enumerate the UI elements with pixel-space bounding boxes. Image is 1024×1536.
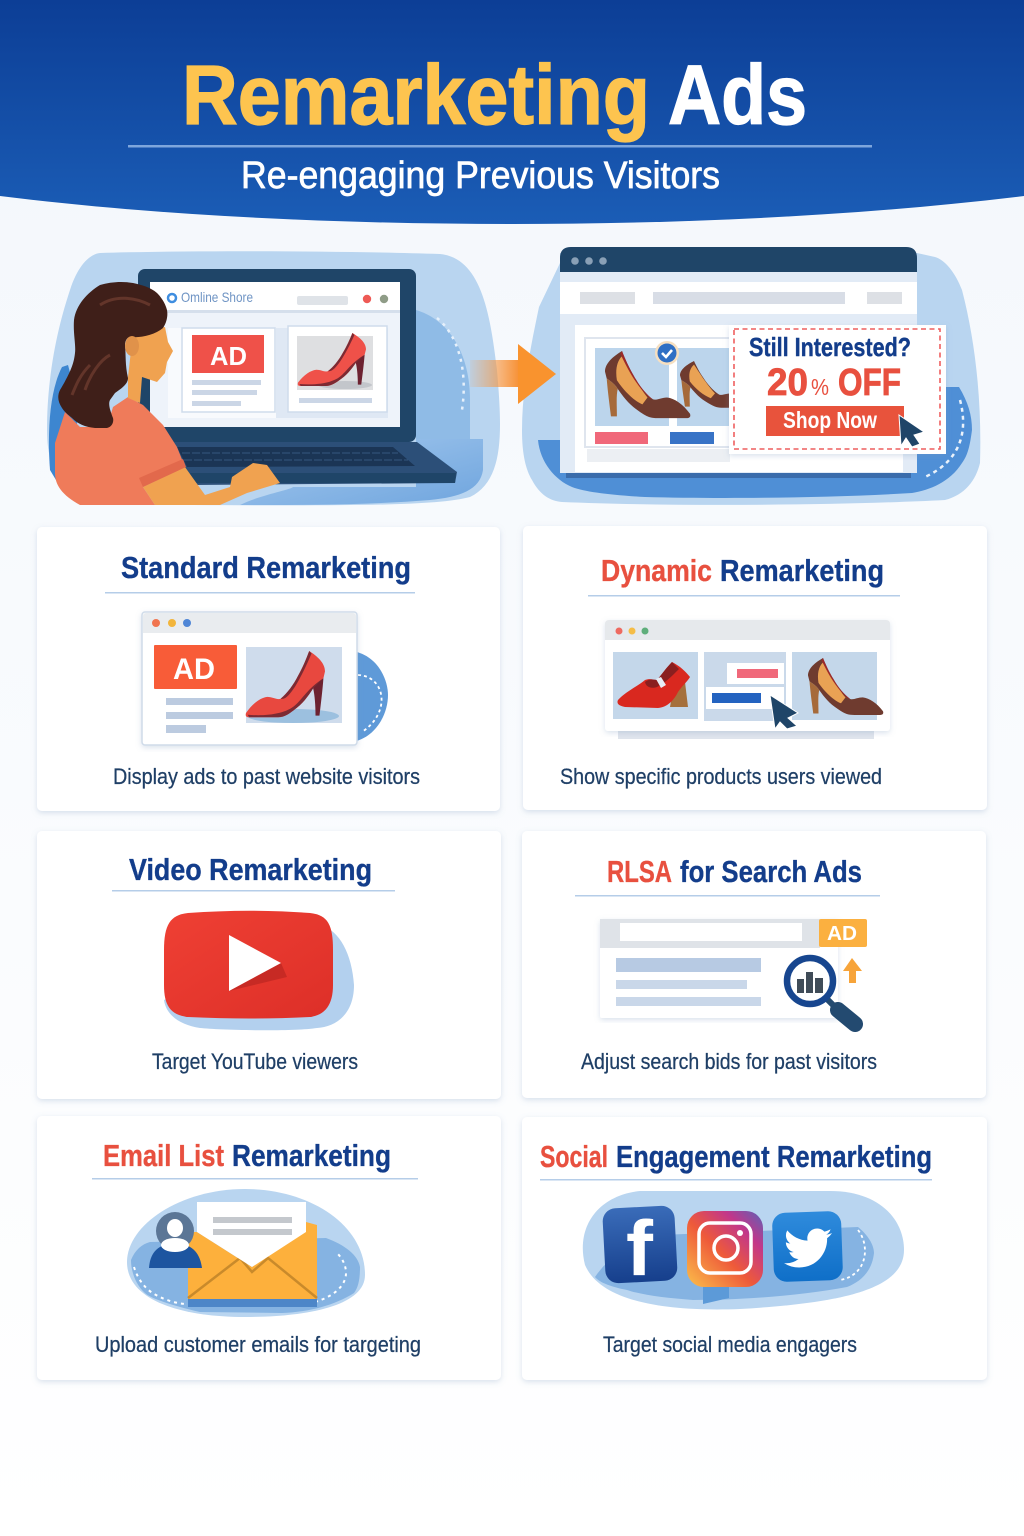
heading: Remarketing <box>720 553 884 588</box>
arrow <box>470 344 556 404</box>
offer popup <box>729 325 946 454</box>
panel: standard remarketing <box>37 527 500 811</box>
heading: Remarketing <box>232 1138 391 1173</box>
panel: dynamic remarketing <box>523 526 987 810</box>
panel: RLSA for search ads <box>522 831 986 1098</box>
discount: OFF <box>838 362 901 404</box>
shirt <box>55 397 185 505</box>
heading: Engagement Remarketing <box>616 1139 932 1174</box>
description: Show specific products users viewed <box>560 764 882 789</box>
brown heel <box>808 658 883 715</box>
site name: Omline Shore <box>181 289 253 305</box>
heading: Dynamic <box>601 553 712 588</box>
cursor icon <box>770 695 798 729</box>
illustration: social icons <box>583 1191 904 1309</box>
description: Upload customer emails for targeting <box>95 1332 421 1357</box>
panel: social engagement remarketing <box>522 1117 987 1380</box>
icon: instagram <box>687 1211 763 1287</box>
description: Target social media engagers <box>603 1332 857 1357</box>
hero: retargeted ad shown in browser <box>522 247 980 505</box>
discount: % <box>811 374 829 400</box>
ad card: AD <box>210 341 247 371</box>
ad card <box>182 328 275 412</box>
site logo <box>168 294 176 302</box>
ad tag: AD <box>827 923 857 945</box>
icon: contact person <box>149 1212 202 1268</box>
browser window <box>560 247 917 478</box>
arm and hand <box>143 463 280 505</box>
check badge <box>655 341 679 365</box>
keyboard base <box>173 442 457 485</box>
description: Adjust search bids for past visitors <box>581 1049 877 1074</box>
illustration: ad in browser <box>142 612 388 745</box>
panel: video remarketing <box>37 831 501 1099</box>
heading: RLSA <box>607 854 672 889</box>
laptop <box>138 269 457 485</box>
hair <box>58 282 167 428</box>
woman at laptop <box>55 282 280 505</box>
illustration: envelope and contact <box>127 1189 365 1317</box>
hero: visitor browsing a shop on a laptop <box>47 251 500 505</box>
illustration: product carousel <box>605 620 890 739</box>
red shoe <box>617 662 690 708</box>
heading: Social <box>540 1139 608 1174</box>
heading: for Search Ads <box>680 854 862 889</box>
title: Ads <box>668 48 807 142</box>
product card: red shoe <box>288 326 387 412</box>
icon: magnifier <box>787 958 855 1024</box>
product panel: brown shoes <box>585 338 750 447</box>
description: Display ads to past website visitors <box>113 764 420 789</box>
subtitle: Re-engaging Previous Visitors <box>241 155 720 197</box>
icon: facebook <box>602 1204 678 1292</box>
illustration: search results with ad <box>600 919 867 1024</box>
discount: 20 <box>767 362 808 404</box>
cursor icon <box>899 415 924 447</box>
icon: twitter <box>772 1211 843 1282</box>
description: Target YouTube viewers <box>152 1049 358 1074</box>
shop now button: Shop Now <box>783 407 877 433</box>
popup headline: Still Interested? <box>749 332 911 362</box>
header banner <box>0 0 1024 224</box>
title: Remarketing <box>182 48 650 142</box>
illustration: ad in browser: AD <box>173 653 215 686</box>
panel: email list remarketing <box>37 1116 501 1380</box>
icon: video play button <box>164 911 354 1030</box>
icon: up arrow <box>843 958 862 983</box>
heading: Standard Remarketing <box>121 550 411 585</box>
ad tag <box>819 919 867 947</box>
heading: Email List <box>103 1138 224 1173</box>
neck and face <box>128 327 173 403</box>
heading: Video Remarketing <box>129 852 372 887</box>
icon: facebook: f <box>626 1204 654 1292</box>
